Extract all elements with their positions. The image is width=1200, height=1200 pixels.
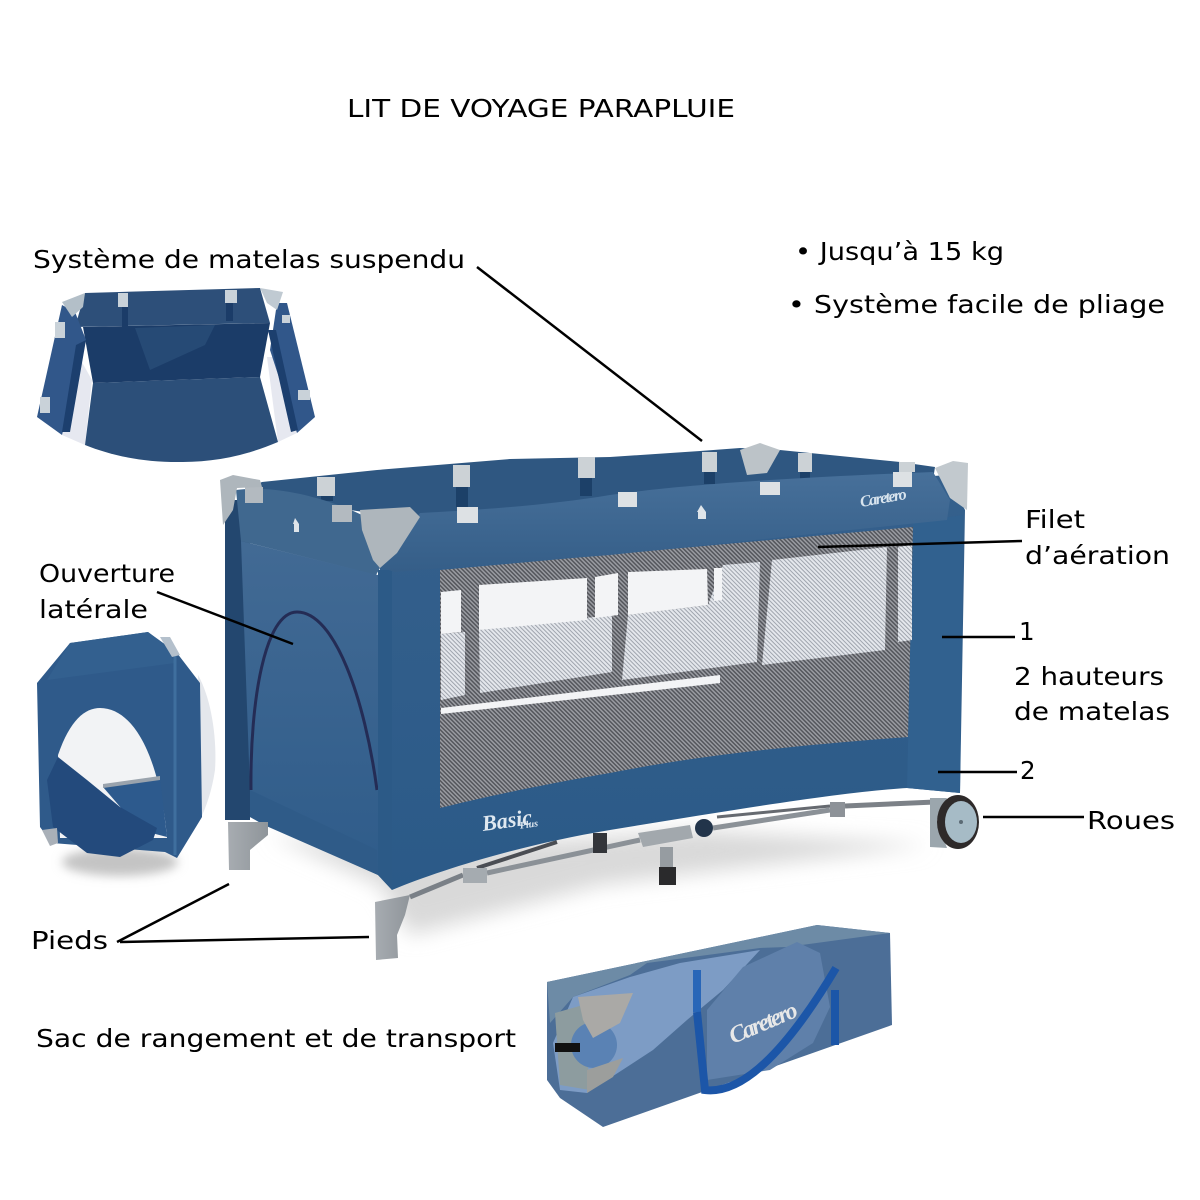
up arrows on rim — [293, 505, 706, 532]
interior seen through mesh — [441, 545, 912, 714]
front right post — [907, 515, 963, 793]
label: 2 hauteurs de matelas: 2 hauteurs — [1014, 662, 1164, 691]
caretero logo: Caretero — [859, 486, 908, 511]
main product: travel cot — [220, 443, 979, 960]
frame tubes — [410, 802, 935, 897]
leader: air mesh — [818, 541, 1022, 547]
label: filet d'aération: Filet — [1025, 505, 1085, 534]
inset photo: suspended mattress — [37, 288, 315, 462]
label: ouverture latérale — [39, 559, 175, 624]
straps — [321, 470, 810, 507]
mesh window — [440, 527, 913, 808]
title: LIT DE VOYAGE PARAPLUIE — [347, 94, 735, 123]
side panel — [241, 541, 378, 875]
feature list: • Jusqu’à 15 kg — [795, 237, 1004, 266]
side opening arch — [251, 612, 377, 790]
foot back — [228, 822, 268, 870]
front rim — [380, 472, 950, 572]
label: sac de rangement et de transport: Sac de rangement et de transport — [36, 1024, 516, 1053]
wheel — [930, 795, 979, 849]
front panel — [378, 475, 965, 890]
back rim clips — [317, 452, 915, 496]
label: ouverture latérale: Ouverture — [39, 559, 175, 588]
side rim — [236, 489, 380, 575]
side bottom strip — [250, 790, 378, 875]
front rim clips — [245, 472, 912, 523]
frame joints — [463, 802, 845, 885]
label: height 1: 1 — [1019, 617, 1035, 646]
corner fittings — [220, 443, 968, 568]
feature list — [788, 237, 1165, 319]
label: ouverture latérale: latérale — [39, 595, 148, 624]
basic plus logo: Basic — [479, 804, 534, 836]
storage bag — [547, 925, 892, 1127]
label: système de matelas suspendu: Système de matelas suspendu — [33, 245, 465, 274]
feature list: • Système facile de pliage — [788, 290, 1165, 319]
basic plus logo: Plus — [519, 818, 539, 832]
label: pieds: Pieds — [31, 926, 108, 955]
leader: height 2 — [938, 771, 1017, 773]
back rim — [245, 448, 935, 520]
front corner post seam — [378, 570, 392, 890]
label: roues: Roues — [1087, 806, 1175, 835]
label: filet d'aération: d’aération — [1025, 541, 1170, 570]
leader: suspended mattress — [477, 267, 702, 441]
foot front — [375, 895, 410, 960]
label: 2 hauteurs de matelas: de matelas — [1014, 697, 1170, 726]
label: height 2: 2 — [1020, 756, 1036, 785]
leaders: feet — [117, 884, 369, 942]
floor shadow — [270, 830, 930, 935]
back left post — [225, 500, 250, 820]
leader: side opening — [157, 592, 293, 644]
bag logo: Caretero — [725, 997, 802, 1050]
inset photo: side opening — [37, 632, 215, 876]
label: filet d'aération — [1025, 505, 1170, 570]
label: 2 hauteurs de matelas — [1014, 662, 1170, 726]
leader: height 1 — [942, 636, 1015, 638]
leader: wheels — [983, 816, 1084, 818]
